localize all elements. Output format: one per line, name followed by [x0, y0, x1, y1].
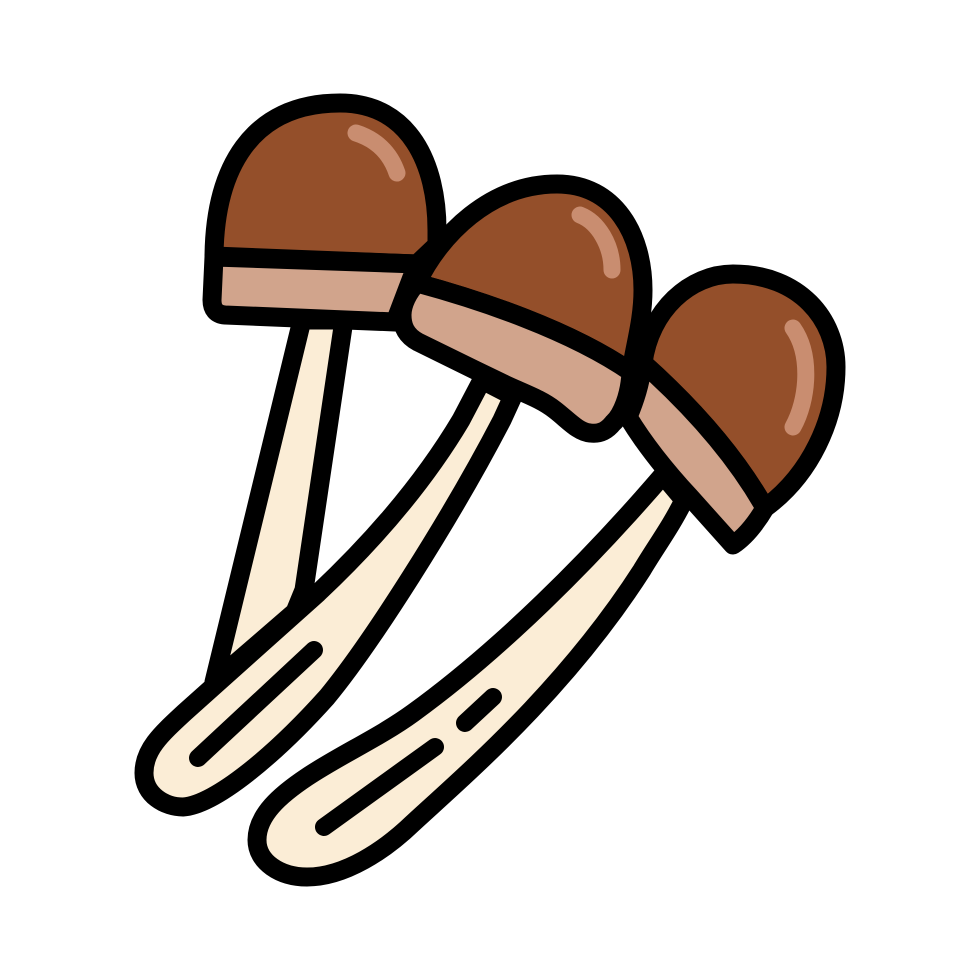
gills 2	[402, 283, 631, 433]
stem 3 marks	[324, 697, 493, 827]
mushroom 1: left	[212, 103, 437, 682]
cap 1	[214, 103, 437, 264]
gills 1	[212, 257, 417, 322]
gills 3	[628, 363, 765, 545]
stem 2 mark	[198, 650, 314, 758]
stem 3	[257, 475, 684, 877]
cap 2	[417, 184, 643, 372]
mushroom 2: middle	[144, 184, 643, 807]
stem 1	[214, 320, 344, 682]
stem 2	[144, 380, 513, 807]
highlight 1	[356, 133, 397, 173]
mushroom 3: right	[257, 274, 836, 877]
highlight 2	[580, 215, 612, 270]
highlight 3	[793, 328, 806, 427]
cap 3	[643, 274, 836, 508]
